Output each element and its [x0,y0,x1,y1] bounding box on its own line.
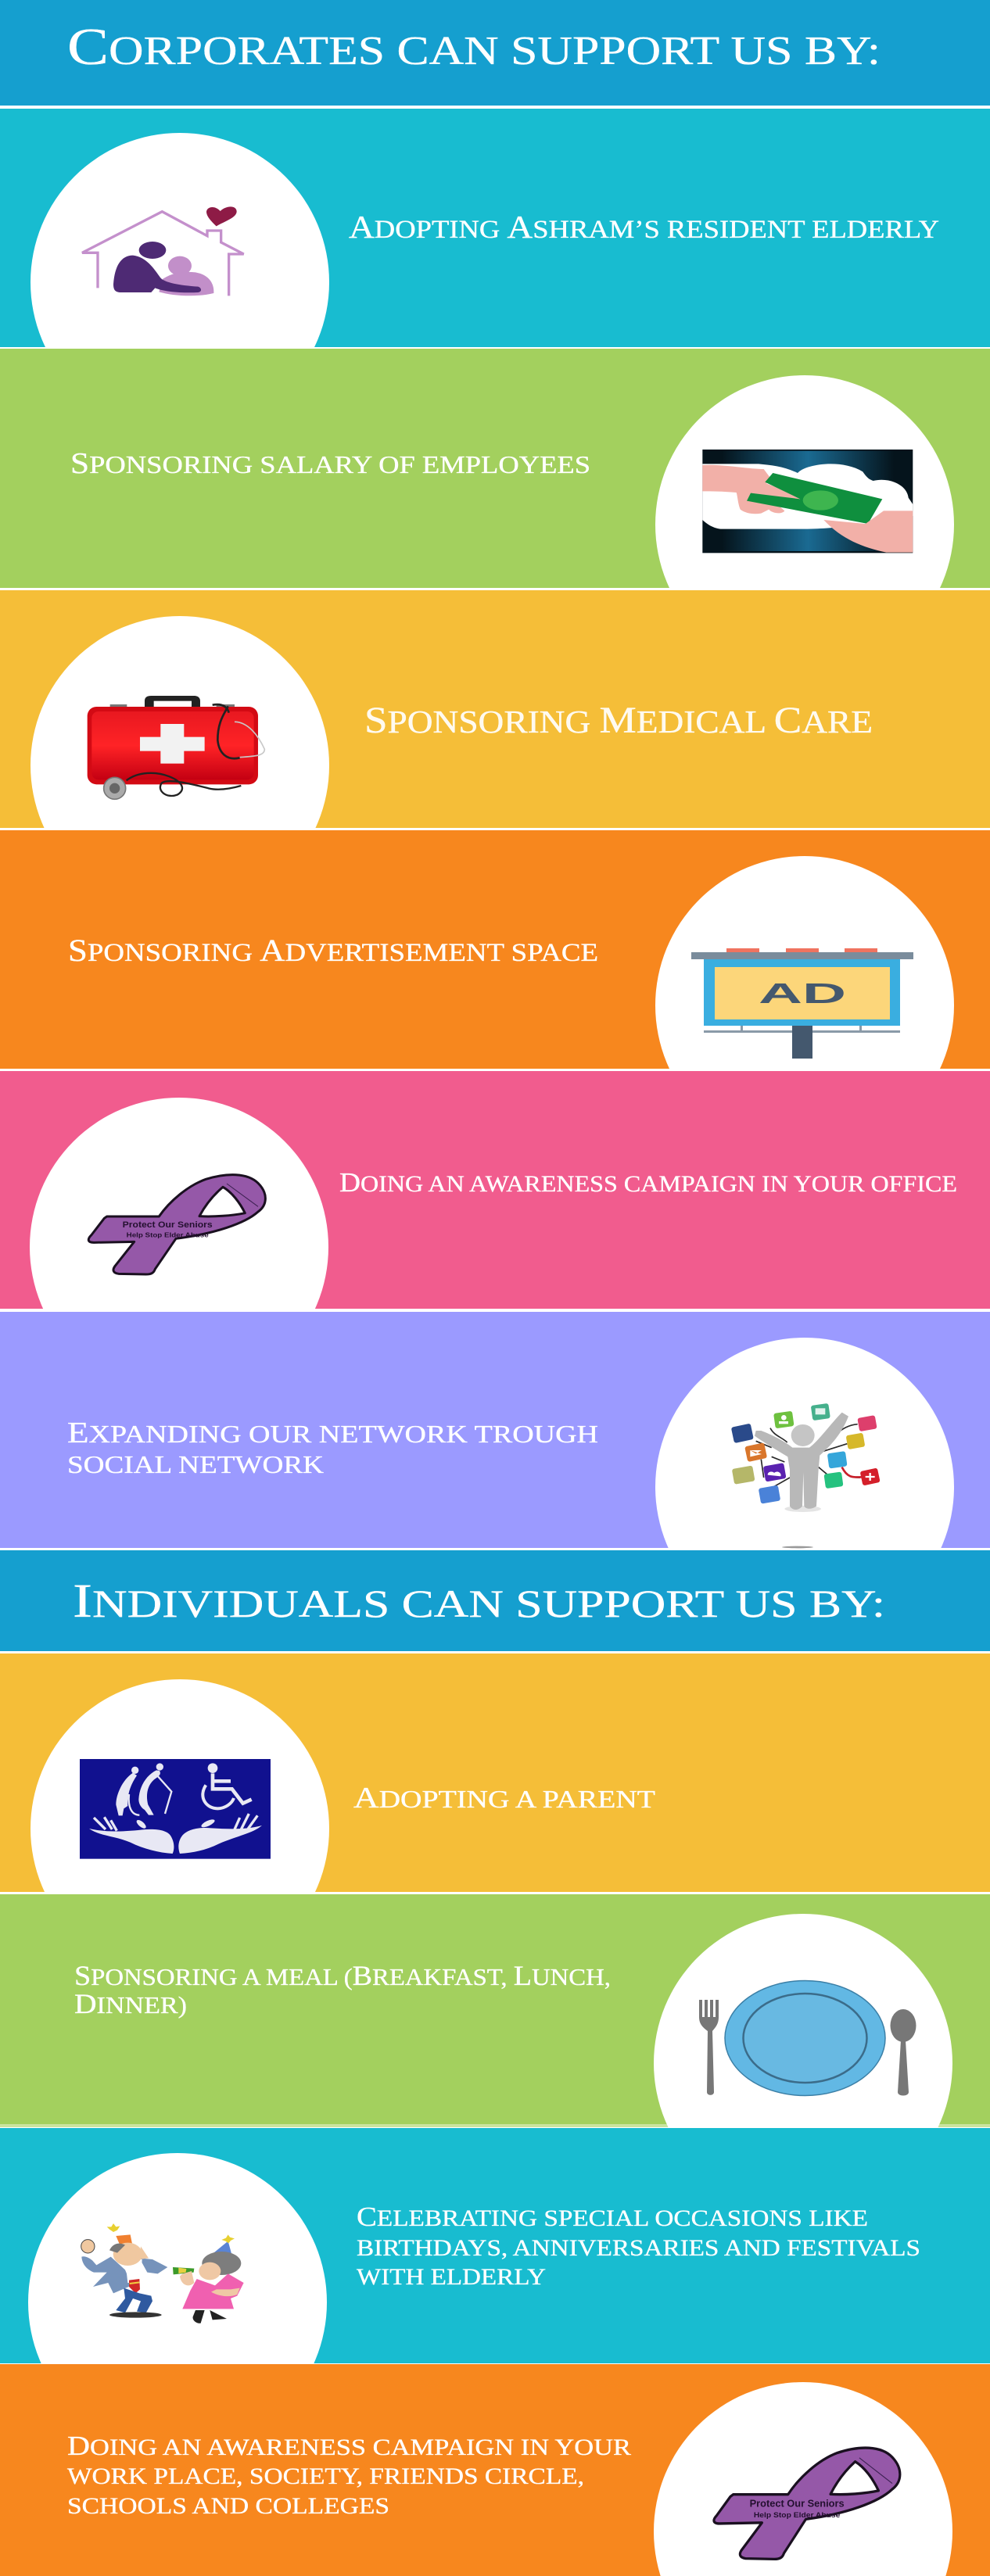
circle backdrop [654,2382,952,2576]
heading band: corporates [0,0,990,106]
icon: hands exchanging money [702,450,913,553]
icon: billboard: AD [759,977,846,1009]
text: expanding network: EXPANDING OUR NETWORK TROUGH [67,1417,598,1449]
text: sponsoring a meal: DINNER) [74,1988,187,2019]
text: awareness campaign in community: SCHOOLS AND COLLEGES [67,2493,389,2519]
icon: purple ribbon: Protect Our Seniors [750,2498,845,2509]
panel: sponsoring advertisement space [0,830,990,1069]
circle backdrop [30,616,329,828]
icon: purple ribbon: Help Stop Elder Abuse [754,2511,840,2519]
icon: purple ribbon [714,2448,900,2559]
icon: house with carer and elder [82,206,244,296]
panel: sponsoring salary [0,349,990,588]
text: celebrating special occasions: CELEBRATING SPECIAL OCCASIONS LIKE [357,2202,868,2232]
text: sponsoring salary: SPONSORING SALARY OF EMPLOYEES [70,447,590,480]
text: awareness campaign in community: DOING AN AWARENESS CAMPAIGN IN YOUR [67,2431,631,2461]
icon: elder care emblem [80,1759,271,1859]
icon: medical kit with stethoscope [88,696,264,799]
text: sponsoring medical care: SPONSORING MEDICAL CARE [364,700,873,741]
circle backdrop [654,1914,952,2127]
text: awareness campaign in community [67,2431,631,2519]
panel: adopting resident elderly [0,109,990,347]
text: celebrating special occasions: BIRTHDAYS, ANNIVERSARIES AND FESTIVALS [357,2235,920,2261]
text: sponsoring a meal [74,1960,611,2019]
heading: individuals: INDIVIDUALS CAN SUPPORT US BY: [73,1575,885,1628]
circle backdrop [655,856,954,1069]
panel: sponsoring medical care [0,590,990,828]
panel: celebrating special occasions [0,2128,990,2363]
icon: plate fork and spoon [699,1981,916,2095]
text: sponsoring a meal: SPONSORING A MEAL ( BREAKFAST, LUNCH, [74,1960,611,1991]
text: awareness campaign in office: DOING AN AWARENESS CAMPAIGN IN YOUR OFFICE [339,1167,957,1198]
circle backdrop [30,133,329,347]
heading band: individuals [0,1550,990,1651]
circle backdrop [30,1098,328,1309]
text: expanding network [67,1417,598,1478]
text: celebrating special occasions: WITH ELDERLY [357,2264,546,2290]
icon: person with social media tiles [731,1403,881,1548]
text: expanding network: SOCIAL NETWORK [67,1450,324,1478]
panel: expanding network [0,1312,990,1548]
text: sponsoring advertisement space: SPONSORING ADVERTISEMENT SPACE [68,933,598,968]
panel: awareness campaign in community [0,2364,990,2576]
icon: purple ribbon [88,1175,265,1274]
icon: purple ribbon: Protect Our Seniors [123,1220,213,1230]
text: adopting a parent: ADOPTING A PARENT [353,1782,656,1815]
heading: corporates: CORPORATES CAN SUPPORT US BY: [67,18,881,76]
circle backdrop [655,1338,954,1548]
icon: purple ribbon: Help Stop Elder Abuse [127,1231,209,1238]
circle backdrop [30,1679,329,1892]
icon: dancing elderly couple [81,2223,244,2323]
icon: billboard [691,948,913,1059]
circle backdrop [28,2153,327,2363]
text: adopting resident elderly: ADOPTING ASHRAM’S RESIDENT ELDERLY [349,209,939,245]
panel: adopting a parent [0,1653,990,1892]
circle backdrop [655,375,954,588]
panel: awareness campaign in office [0,1071,990,1309]
panel: sponsoring a meal [0,1894,990,2127]
text: awareness campaign in community: WORK PLACE, SOCIETY, FRIENDS CIRCLE, [67,2463,584,2489]
text: celebrating special occasions [357,2202,920,2290]
